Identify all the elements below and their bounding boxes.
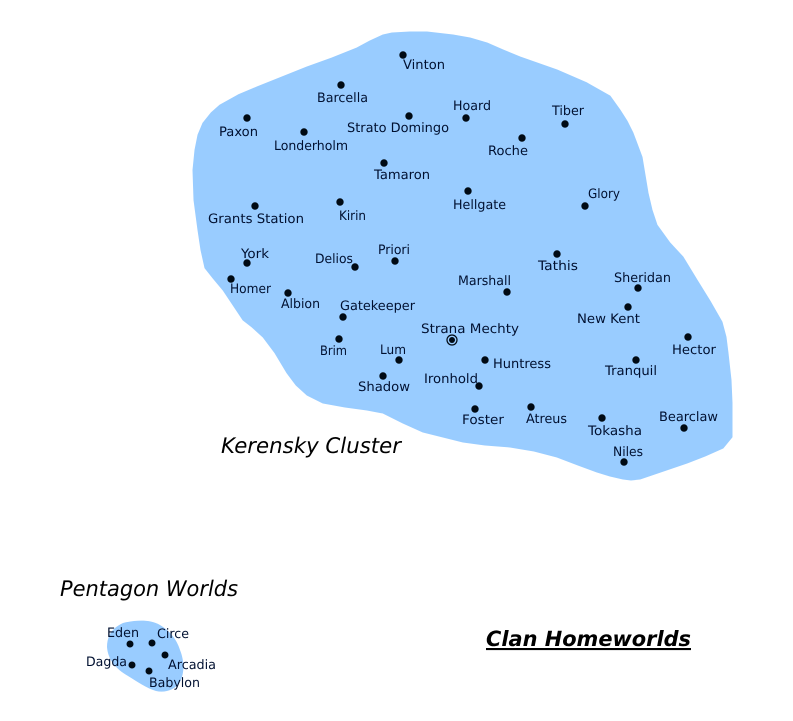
labels: Kerensky Cluster worlds: Albion <box>281 297 320 312</box>
labels: Kerensky Cluster worlds: Strana Mechty <box>421 322 519 337</box>
labels: Kerensky Cluster worlds: Hector <box>672 343 717 358</box>
labels: Kerensky Cluster worlds: Homer <box>230 282 272 297</box>
labels: Pentagon Worlds: Arcadia <box>168 658 216 673</box>
labels: Kerensky Cluster worlds: York <box>240 247 269 262</box>
labels: Kerensky Cluster worlds: Tokasha <box>587 424 642 439</box>
labels: Kerensky Cluster worlds: Lum <box>380 343 406 358</box>
title: Clan Homeworlds: Clan Homeworlds <box>486 627 691 651</box>
labels: Kerensky Cluster worlds: Londerholm <box>274 139 348 154</box>
labels: Pentagon Worlds: Babylon <box>149 676 200 691</box>
panel: Pentagon Worlds region <box>107 621 183 692</box>
labels: Kerensky Cluster worlds: Atreus <box>526 412 567 427</box>
labels: Pentagon Worlds: Dagda <box>86 655 127 670</box>
labels: Kerensky Cluster worlds: Ironhold <box>424 372 478 387</box>
labels: Kerensky Cluster worlds: Brim <box>320 344 347 359</box>
labels: Kerensky Cluster worlds: Niles <box>613 445 643 460</box>
labels: Kerensky Cluster worlds: Kirin <box>339 209 366 224</box>
icon: Strana Mechty capital marker <box>447 335 457 345</box>
labels: Kerensky Cluster worlds: Priori <box>378 243 410 258</box>
labels: Pentagon Worlds: Eden <box>107 626 139 641</box>
labels: Kerensky Cluster worlds: Bearclaw <box>659 410 718 425</box>
labels: Kerensky Cluster worlds: New Kent <box>577 312 640 327</box>
labels: Kerensky Cluster worlds: Gatekeeper <box>340 299 416 314</box>
labels: Kerensky Cluster worlds: Tiber <box>551 104 585 119</box>
labels: Kerensky Cluster worlds: Shadow <box>358 380 410 395</box>
labels: Kerensky Cluster worlds: Hellgate <box>453 198 506 213</box>
labels: Kerensky Cluster worlds: Tamaron <box>373 168 430 183</box>
labels: Kerensky Cluster worlds <box>208 58 718 460</box>
labels: Kerensky Cluster worlds: Tranquil <box>604 364 657 379</box>
labels: Kerensky Cluster worlds: Huntress <box>493 357 551 372</box>
labels: Kerensky Cluster worlds: Hoard <box>453 99 491 114</box>
heading: Pentagon Worlds: Pentagon Worlds <box>60 577 238 602</box>
labels: Kerensky Cluster worlds: Strato Domingo <box>347 121 449 136</box>
labels: Pentagon Worlds <box>86 626 216 691</box>
labels: Pentagon Worlds: Circe <box>157 627 189 642</box>
labels: Kerensky Cluster worlds: Grants Station <box>208 212 304 227</box>
labels: Kerensky Cluster worlds: Roche <box>488 144 528 159</box>
labels: Kerensky Cluster worlds: Delios <box>315 252 353 267</box>
labels: Kerensky Cluster worlds: Glory <box>588 187 620 202</box>
labels: Kerensky Cluster worlds: Vinton <box>403 58 445 73</box>
panel: Kerensky Cluster region <box>193 32 732 480</box>
labels: Kerensky Cluster worlds: Sheridan <box>614 271 671 286</box>
world markers: Kerensky Cluster <box>227 51 692 466</box>
labels: Kerensky Cluster worlds: Foster <box>462 413 505 428</box>
labels: Kerensky Cluster worlds: Marshall <box>458 274 511 289</box>
heading: Kerensky Cluster: Kerensky Cluster <box>221 434 402 459</box>
labels: Kerensky Cluster worlds: Barcella <box>317 91 368 106</box>
labels: Kerensky Cluster worlds: Paxon <box>219 125 258 140</box>
world markers: Pentagon Worlds <box>126 640 168 674</box>
labels: Kerensky Cluster worlds: Tathis <box>537 259 578 274</box>
